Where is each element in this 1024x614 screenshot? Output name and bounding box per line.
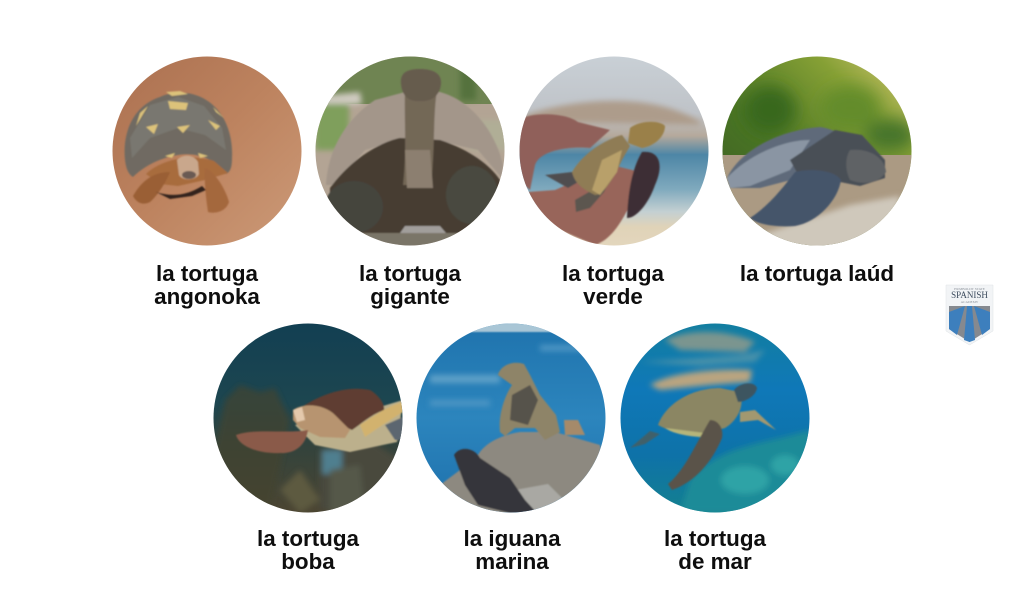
label: la tortuga boba: boba bbox=[281, 549, 335, 574]
legs bbox=[325, 181, 383, 233]
shell bbox=[658, 388, 742, 434]
label: la tortuga gigante: gigante bbox=[370, 284, 450, 309]
photo: la tortuga verde bbox=[519, 56, 709, 246]
logo: Spanish Academy shield: ACADEMY bbox=[961, 300, 979, 304]
turtle body bbox=[572, 135, 630, 195]
shell bbox=[125, 93, 232, 177]
photo: la tortuga boba bbox=[213, 323, 403, 513]
label: la tortuga de mar: de mar bbox=[678, 549, 752, 574]
rock bbox=[440, 432, 601, 513]
photo: la tortuga laúd bbox=[722, 56, 916, 250]
shell bbox=[727, 127, 846, 188]
head bbox=[628, 122, 665, 148]
photo: la tortuga de mar bbox=[620, 323, 810, 513]
front flipper bbox=[236, 430, 308, 453]
turtle body bbox=[295, 400, 403, 452]
shell bbox=[300, 389, 384, 430]
label: la tortuga verde: verde bbox=[583, 284, 643, 309]
logo: Spanish Academy shield: HUMBOLDT STATE bbox=[954, 287, 985, 291]
label: la tortuga boba: la tortuga bbox=[257, 526, 360, 551]
dark flipper bbox=[627, 152, 660, 218]
surface reflection bbox=[650, 370, 752, 390]
head bbox=[177, 156, 199, 179]
head bbox=[846, 150, 886, 183]
logo: Spanish Academy shield: SPANISH bbox=[951, 290, 988, 300]
front left flipper bbox=[668, 420, 722, 490]
lower iguana bbox=[454, 449, 537, 513]
body and legs bbox=[146, 158, 228, 186]
neck and head bbox=[403, 90, 437, 185]
head bbox=[734, 383, 757, 402]
shell bbox=[326, 92, 503, 185]
label: la tortuga gigante: la tortuga bbox=[359, 261, 462, 286]
label: la iguana marina: la iguana bbox=[463, 526, 561, 551]
photo: la iguana marina bbox=[416, 323, 606, 513]
label: la tortuga laúd: la tortuga laúd bbox=[740, 261, 894, 286]
photo: la tortuga angonoka bbox=[112, 56, 302, 246]
reef bbox=[680, 430, 810, 513]
label: la tortuga de mar: la tortuga bbox=[664, 526, 767, 551]
dark body bbox=[330, 138, 500, 240]
label: la tortuga verde: la tortuga bbox=[562, 261, 665, 286]
head bbox=[293, 405, 350, 438]
logo: Spanish Academy shield bbox=[946, 285, 993, 345]
photo: la tortuga gigante bbox=[315, 56, 510, 247]
hand bbox=[519, 114, 610, 190]
upper iguana bbox=[498, 363, 560, 440]
body bbox=[790, 130, 885, 186]
flipper bbox=[750, 170, 841, 226]
label: la tortuga angonoka: la tortuga bbox=[156, 261, 259, 286]
rear flipper bbox=[630, 431, 660, 448]
rear flipper bbox=[360, 402, 403, 437]
label: la tortuga angonoka: angonoka bbox=[154, 284, 260, 309]
label: la iguana marina: marina bbox=[475, 549, 549, 574]
front right flipper bbox=[740, 410, 776, 430]
